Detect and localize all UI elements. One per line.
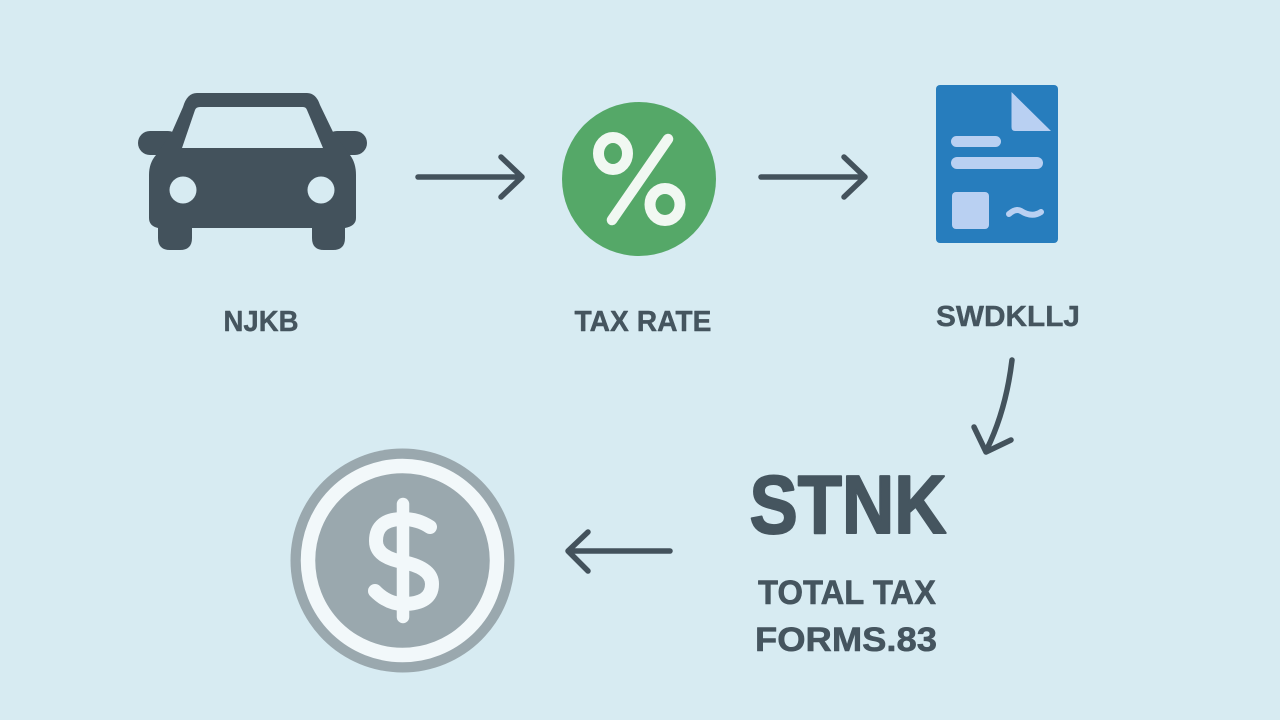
arrow: car to tax rate	[418, 157, 522, 197]
text: total tax forms: TOTAL TAX	[758, 574, 936, 612]
arrow: tax rate to document	[761, 157, 865, 197]
arrow: total to dollar	[568, 532, 670, 571]
arrow: document to total	[974, 360, 1012, 452]
icon: dollar coin	[290, 448, 514, 672]
icon: car	[138, 93, 367, 250]
heading: STNK: STNK	[750, 458, 947, 551]
label: NJKB: NJKB	[224, 306, 298, 338]
icon: percent badge	[562, 102, 716, 256]
text: total tax forms	[755, 574, 937, 659]
text: total tax forms: FORMS.83	[755, 621, 937, 659]
icon: document	[936, 85, 1058, 243]
label: TAX RATE: TAX RATE	[574, 306, 712, 338]
label: SWDKLLJ: SWDKLLJ	[936, 301, 1080, 333]
